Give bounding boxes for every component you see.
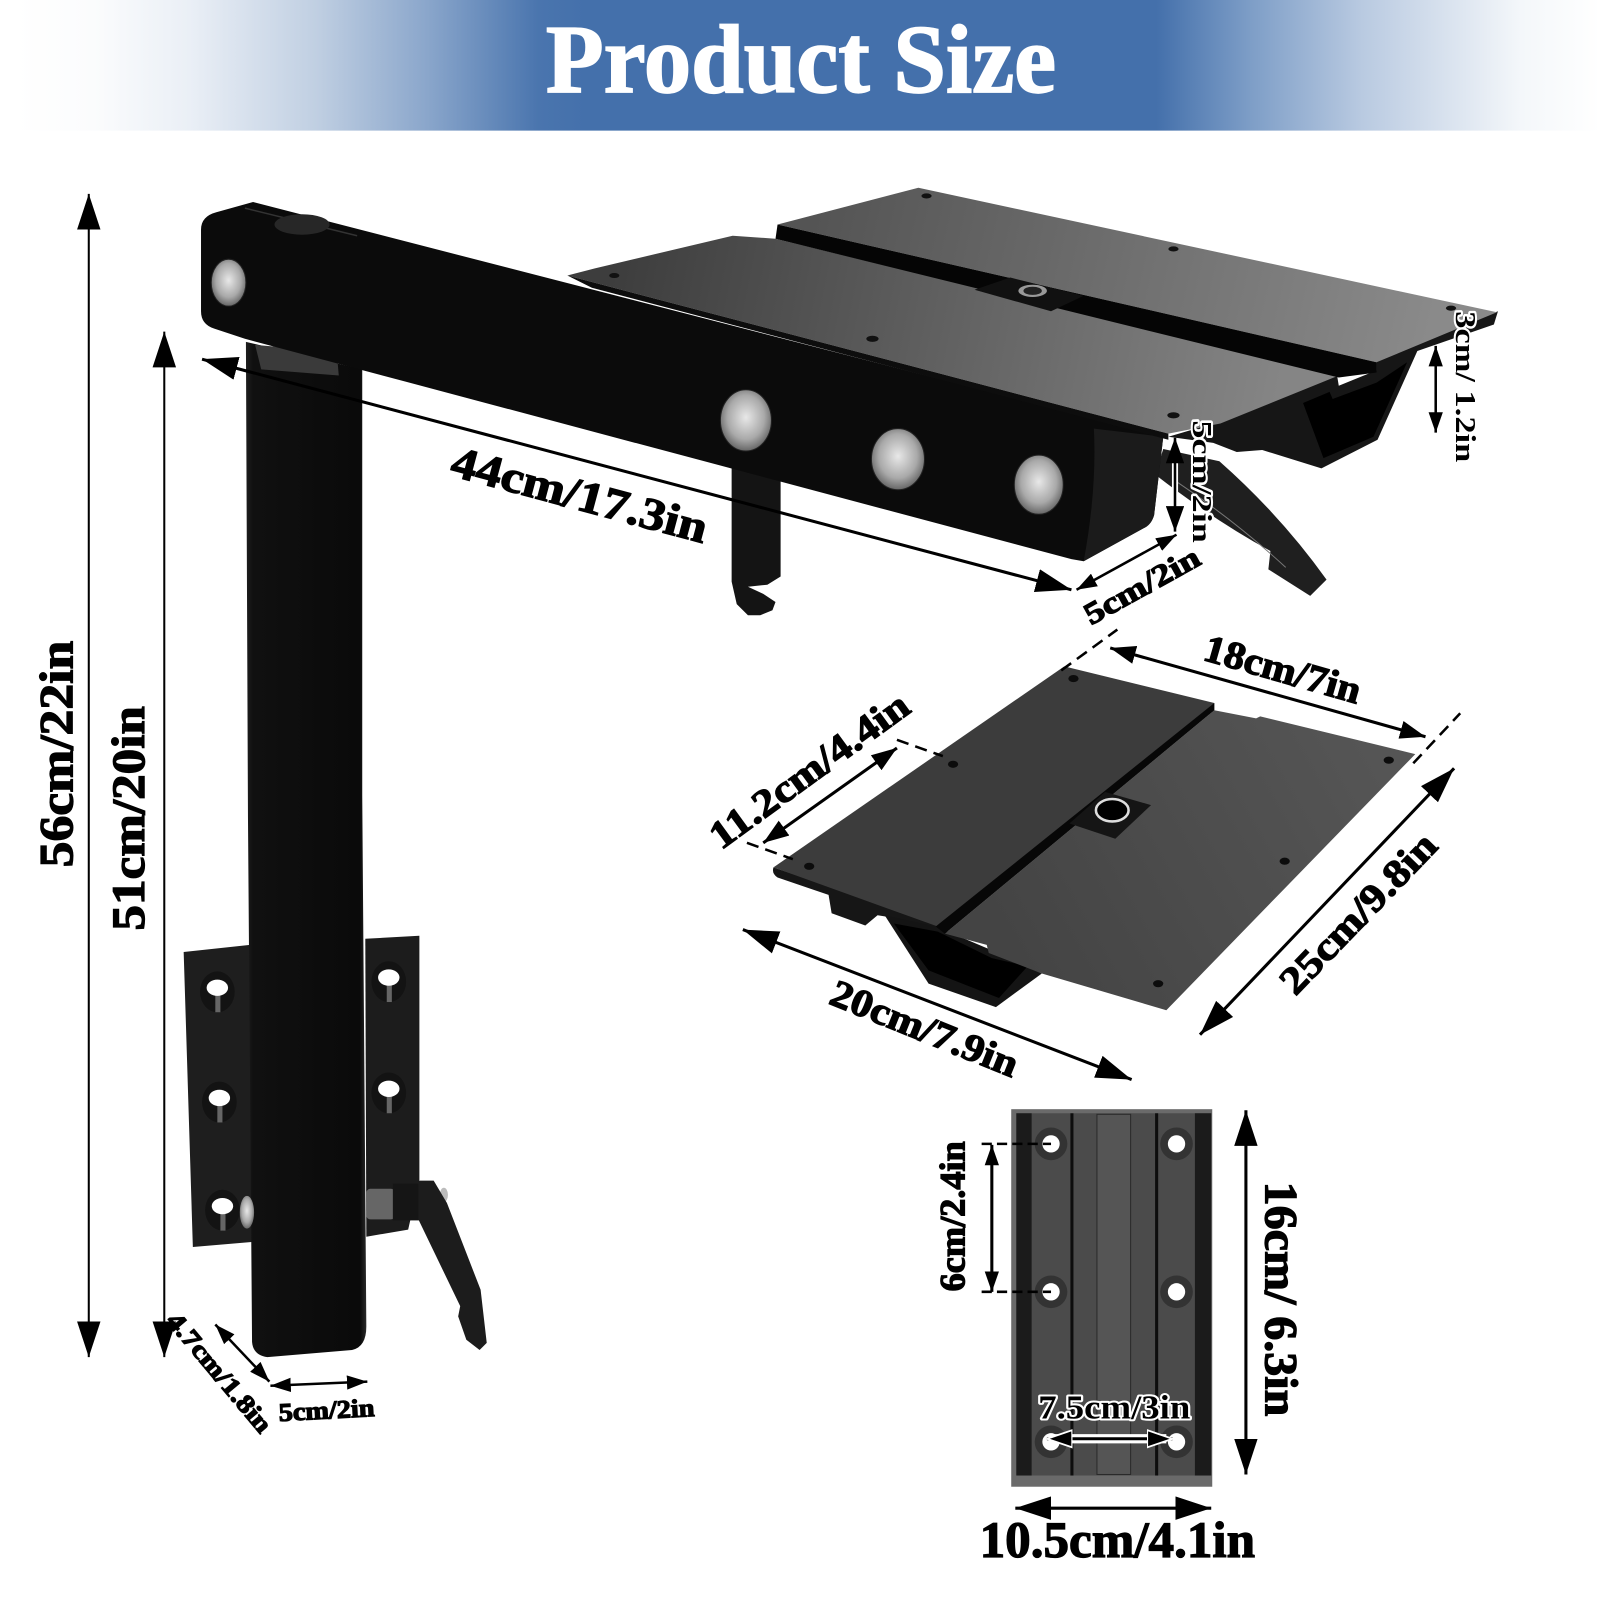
label: 5cm/2in: 5cm/2in	[278, 1393, 375, 1427]
label: 16cm/6.3in: 16cm/ 6.3in	[1254, 1182, 1306, 1416]
product: plate bottom view	[1011, 1109, 1212, 1487]
label: 10.5cm/4.1in: 10.5cm/4.1in	[980, 1513, 1255, 1569]
dashed guides for hole spacing	[982, 1144, 1051, 1292]
arrow: arm length 44cm	[202, 359, 1071, 590]
lever handle	[418, 1181, 487, 1350]
vertical pole	[246, 342, 366, 1357]
plate underside profile	[885, 915, 1042, 1007]
plate front lip and clip	[773, 867, 938, 931]
lever knob	[393, 1184, 423, 1220]
arrow: arm end width	[1077, 535, 1177, 590]
label: 4.7cm/1.8in: 4.7cm/1.8in	[161, 1306, 278, 1438]
plate right section	[945, 710, 1415, 1010]
arrow: 7.5cm	[1047, 1434, 1172, 1443]
plate groove	[936, 703, 1214, 934]
header banner	[15, 0, 1600, 131]
pole mount plate left	[184, 945, 253, 1247]
center block	[1069, 792, 1151, 839]
bottom plate rails	[1016, 1113, 1211, 1476]
plate center bracket	[974, 278, 1084, 311]
arrow: 11.2cm	[763, 748, 897, 843]
arrow: total height 56cm	[88, 194, 90, 1357]
arrow: 25cm	[1200, 768, 1454, 1035]
locking handle under plate	[1155, 449, 1327, 596]
lever nut	[366, 1189, 395, 1219]
pole mount plate right	[365, 936, 419, 1237]
arrow: pole height 51cm	[163, 332, 165, 1357]
arrow: 20cm	[743, 930, 1132, 1080]
plate groove	[776, 224, 1377, 378]
product: sliding plate top view	[773, 666, 1415, 1010]
plate screw holes	[804, 675, 1394, 987]
plate profile underside	[1168, 311, 1498, 468]
arm hook	[732, 459, 781, 615]
pole top bracket	[255, 345, 339, 376]
pole bolt	[240, 1196, 254, 1229]
arm top disc	[245, 208, 357, 236]
arrow: pole depth	[215, 1324, 269, 1382]
label: 18cm/7in: 18cm/7in	[1199, 627, 1366, 713]
arm end facet	[1084, 429, 1163, 561]
product: folding arm with pole	[184, 188, 1498, 1357]
label: 44cm/17.3in: 44cm/17.3in	[446, 437, 713, 553]
plate lip	[567, 276, 1168, 440]
label: 7.5cm/3in: 7.5cm/3in	[1038, 1389, 1191, 1426]
dashed guides for the sliding plate	[747, 630, 1460, 859]
bottom plate body	[1011, 1109, 1212, 1487]
arrow: 18cm width	[1110, 648, 1426, 737]
bottom plate holes	[1035, 1128, 1193, 1458]
plate upper surface	[778, 188, 1497, 362]
label: 11.2cm/4.4in: 11.2cm/4.4in	[701, 684, 918, 858]
label: 3cm/1.2in: 3cm/ 1.2in	[1449, 311, 1480, 462]
mount plate holes	[200, 961, 406, 1231]
label: arm end height 5cm/2in: 5cm/2in	[1187, 420, 1218, 543]
title: Product Size	[546, 6, 1056, 114]
arrow: 6cm	[990, 1145, 993, 1292]
label: arm end width 5cm/2in: 5cm/2in	[1078, 540, 1206, 632]
arm screws	[211, 259, 1063, 514]
lever stud	[440, 1188, 448, 1202]
arrow: pole width	[270, 1382, 367, 1386]
label: 20cm/7.9in: 20cm/7.9in	[824, 972, 1025, 1086]
arrow: arm end height	[1172, 438, 1178, 532]
label: 56cm/22in: 56cm/22in	[30, 641, 83, 867]
arrow: plate profile height	[1434, 346, 1437, 433]
plate lower surface	[567, 236, 1339, 434]
horizontal arm	[201, 202, 1163, 561]
arrow: 10.5cm width	[1015, 1507, 1211, 1510]
label: 25cm/9.8in: 25cm/9.8in	[1271, 824, 1446, 1003]
plate left section	[773, 666, 1214, 927]
plate screw holes	[609, 193, 1456, 418]
label: 6cm/2.4in: 6cm/2.4in	[932, 1141, 972, 1291]
label: 51cm/20in: 51cm/20in	[103, 706, 155, 931]
arrow: 16cm height	[1244, 1110, 1247, 1474]
